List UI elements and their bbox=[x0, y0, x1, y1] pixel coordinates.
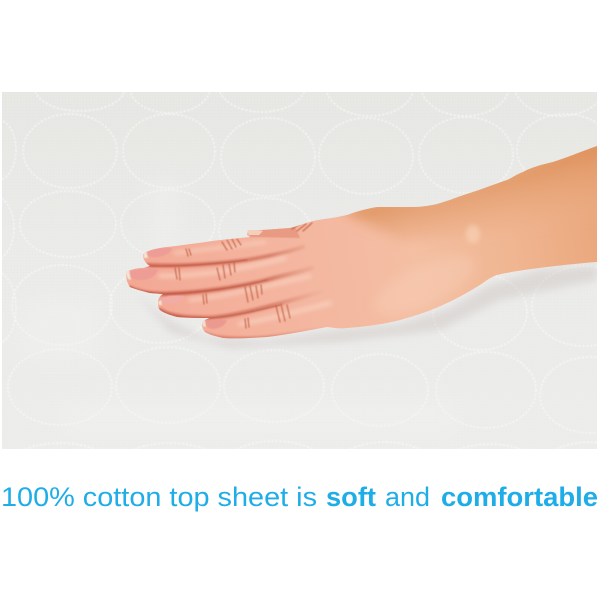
pinky nail bbox=[248, 230, 263, 235]
fingernails bbox=[125, 248, 227, 329]
caption: 100% cotton top sheet is bbox=[1, 482, 317, 512]
caption: comfortable bbox=[441, 482, 598, 512]
quilted circle stitching bbox=[2, 92, 597, 449]
skin base bbox=[120, 140, 600, 345]
soft fold highlights bbox=[20, 180, 460, 435]
caption: soft bbox=[326, 482, 376, 512]
lower-edge red shading on fingers bbox=[130, 247, 325, 339]
back of hand highlight bbox=[384, 258, 472, 308]
shadow under hand bbox=[135, 265, 597, 348]
sharp finger separations bbox=[130, 260, 280, 318]
knuckle wrinkles bbox=[175, 223, 312, 328]
photo: quilted cotton sheet bbox=[2, 92, 597, 449]
pinky finger behind bbox=[248, 227, 300, 238]
finger top highlights bbox=[160, 242, 330, 324]
infographic bbox=[2, 92, 598, 512]
caption: and bbox=[385, 482, 430, 512]
hand and forearm bbox=[126, 146, 597, 338]
tan shading on the forearm bbox=[342, 146, 597, 241]
wrist highlight bbox=[466, 225, 480, 243]
